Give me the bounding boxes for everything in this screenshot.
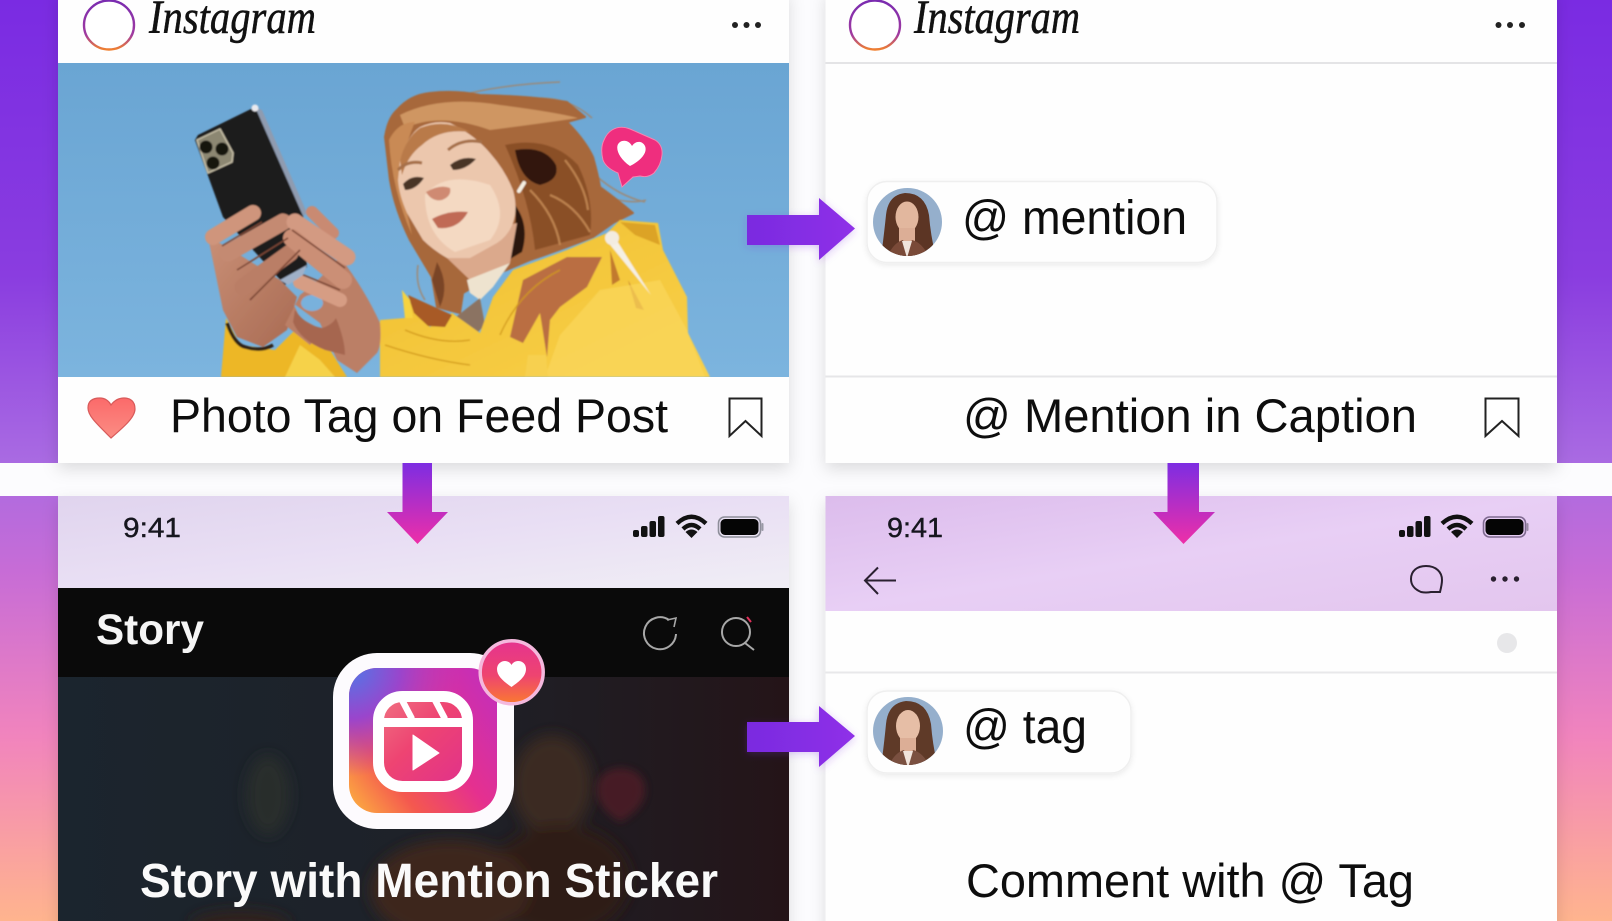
icon: signal: [1399, 516, 1430, 537]
mention pill: [867, 182, 1217, 265]
card background: [826, 496, 1557, 921]
card background: [826, 0, 1557, 463]
grey status dot: [1497, 633, 1517, 653]
icon: more dots: [1491, 576, 1519, 582]
camera module: [197, 129, 233, 173]
icon: more dots: [1496, 22, 1525, 28]
lips: [432, 212, 468, 228]
icon: heart speech bubble: [602, 127, 662, 187]
neck: [447, 223, 517, 280]
icon: heart: [88, 398, 135, 438]
avatar: [873, 697, 943, 765]
wrist hand body: [208, 237, 297, 347]
heading: Story: Story: [96, 606, 204, 654]
icon: wifi: [677, 517, 706, 529]
avatar: [873, 188, 942, 256]
finger creases: [222, 222, 345, 300]
brows: [398, 141, 482, 170]
icon: profile ring: [850, 0, 900, 50]
panel: mention in caption: [826, 0, 1557, 463]
collar flap: [408, 295, 452, 327]
caption: Comment with @ Tag: Comment with @ Tag: [966, 854, 1414, 907]
arrow: story to comment: [747, 706, 855, 767]
icon: profile ring: [84, 0, 134, 50]
time: 9:41: [123, 512, 181, 543]
story background image: [58, 677, 789, 921]
time: 9:41: [887, 512, 943, 543]
panel: comment with tag: [826, 496, 1557, 921]
card background: [58, 0, 789, 463]
turtleneck: [467, 263, 510, 300]
eyes: [403, 177, 424, 190]
icon: battery: [718, 517, 764, 537]
card background: [58, 496, 789, 921]
caption: Photo Tag on Feed Post: Photo Tag on Feed Post: [170, 389, 668, 442]
divider rule: [826, 672, 1557, 674]
icon: battery: [1484, 517, 1528, 537]
jacket main body: [380, 220, 710, 377]
icon: more dots: [732, 22, 761, 28]
hair: [385, 92, 633, 313]
arrow: mention to comment: [1153, 463, 1215, 544]
thumb shadow: [293, 310, 345, 355]
icon: signal: [633, 516, 664, 537]
panel: story with mention sticker: [58, 496, 789, 921]
footer rule: [826, 376, 1557, 378]
panel: photo tag on feed post: [58, 0, 789, 463]
wifi dot: [686, 530, 698, 538]
header rule: [826, 62, 1557, 64]
icon: refresh: [644, 617, 676, 649]
arrow: photo tag to mention: [747, 198, 855, 260]
right gradient side bar: [1557, 0, 1612, 921]
icon: bookmark: [730, 398, 762, 436]
second hand body: [285, 257, 381, 373]
story header bar: [58, 588, 789, 677]
arrow: photo tag to story: [387, 463, 448, 544]
photo: woman taking a selfie: [58, 63, 789, 377]
pill text: @ mention: [962, 192, 1187, 245]
wifi dot: [1451, 530, 1463, 538]
icon: search: [722, 617, 754, 650]
sky gap between hands: [301, 295, 323, 311]
comment header: [826, 496, 1557, 611]
jacket highlights: [545, 280, 705, 377]
phone bottom edge: [280, 265, 307, 285]
phone: [195, 107, 307, 285]
drawstring: [605, 231, 651, 295]
jacket cuff: [221, 318, 347, 377]
icon: heart badge: [480, 641, 543, 704]
status bar: [58, 496, 789, 588]
pill text: @ tag: [963, 701, 1087, 754]
jacket inner: [456, 298, 485, 332]
fingers: [213, 212, 347, 300]
caption: @ Mention in Caption: @ Mention in Caption: [963, 389, 1417, 442]
caption: Story with Mention Sticker: Story with Mention Sticker: [140, 855, 718, 908]
icon: bookmark: [1486, 398, 1518, 436]
hair strays: [417, 82, 646, 300]
orange-brown folds: [510, 257, 602, 357]
left gradient side bar: [0, 0, 58, 921]
watch strap: [227, 323, 273, 349]
icon: reels app icon: [333, 653, 514, 829]
icon: chat bubble: [1411, 566, 1442, 592]
nose: [426, 187, 450, 200]
face: [398, 122, 516, 258]
icon: wifi: [1442, 517, 1472, 529]
tag pill: [867, 691, 1131, 775]
icon: back arrow: [865, 568, 896, 594]
earring: [519, 183, 524, 191]
